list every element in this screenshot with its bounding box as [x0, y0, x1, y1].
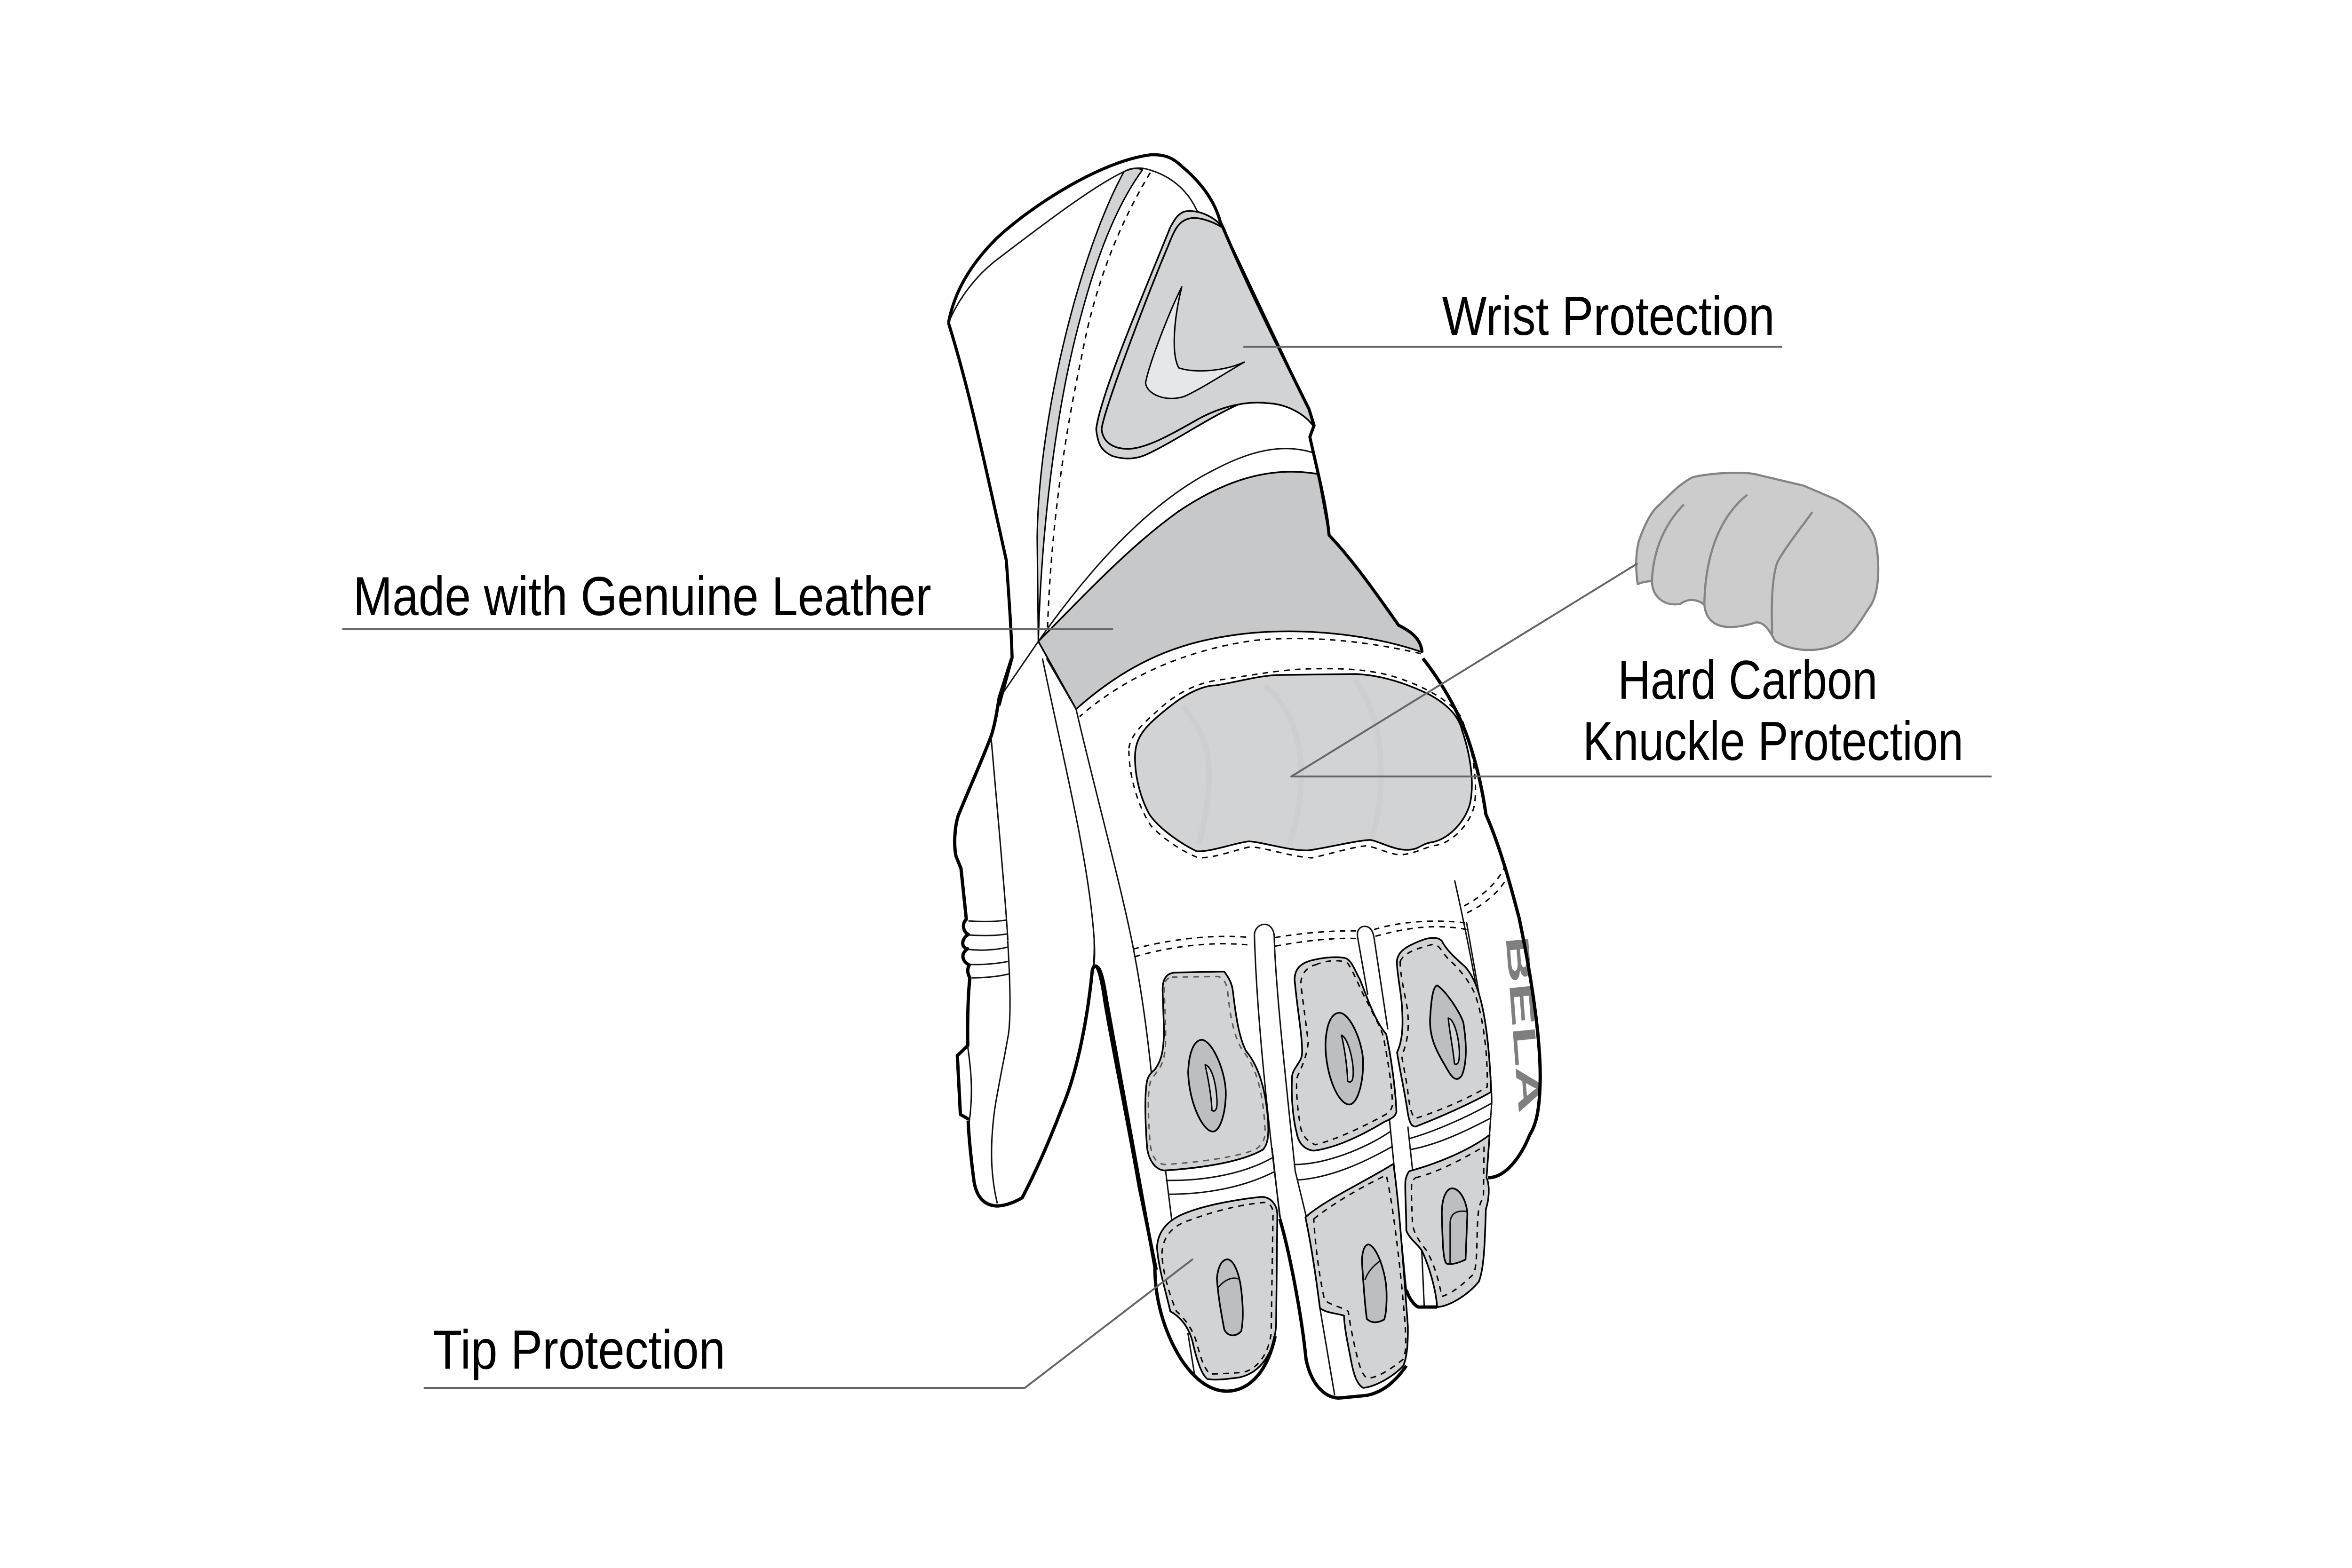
- index finger upper guard: [1145, 972, 1268, 1171]
- ring finger tip outline: [1406, 1290, 1437, 1307]
- label line two: Knuckle Protection: [1583, 711, 1963, 772]
- hand outer right edge: [1423, 658, 1519, 917]
- thumb tip join: [1092, 941, 1094, 972]
- leader lines: [1291, 563, 1992, 776]
- cuff stitching: [1048, 173, 1150, 627]
- hand and thumb section: [955, 658, 1519, 1078]
- thumb ribs: [969, 920, 1009, 978]
- fingers section: [1096, 917, 1540, 1398]
- fist silhouette: [1636, 473, 1878, 650]
- patch inner contour: [1102, 218, 1313, 449]
- thumb lower section: [957, 941, 1094, 1206]
- hand right edge: [1224, 229, 1422, 652]
- panel lower seam: [1047, 658, 1076, 709]
- knuckle stitching: [1129, 669, 1476, 858]
- finger seams: [1166, 922, 1492, 1395]
- wrist band curve: [1038, 449, 1312, 641]
- cuff inner line: [948, 168, 1197, 323]
- thumb crotch outline: [1092, 966, 1156, 1270]
- thumb inner curve: [992, 941, 1010, 1204]
- gray side strip: [1037, 168, 1143, 641]
- knuckle protection patch: [1135, 674, 1472, 851]
- leader line: [1243, 346, 1782, 348]
- finger base stitching: [1133, 921, 1467, 957]
- fist icon: hard carbon knuckle: [1636, 473, 1878, 650]
- little finger outline: [1488, 917, 1540, 1178]
- thumb bottom outline: [968, 970, 1092, 1206]
- leader line: [424, 1259, 1193, 1388]
- genuine leather panel: [1038, 472, 1422, 709]
- callout: tip protection: [424, 1259, 1193, 1388]
- label: Tip Protection: [433, 1319, 725, 1381]
- thumb seam: [1001, 641, 1038, 696]
- outer dashed seams: [1464, 868, 1507, 913]
- callout: hard carbon knuckle protection: [1291, 563, 1992, 776]
- fist finger lines: [1652, 495, 1812, 634]
- label: Made with Genuine Leather: [353, 566, 931, 627]
- label: Wrist Protection: [1442, 285, 1775, 347]
- thumb inner seam: [991, 736, 1008, 941]
- cuff and wrist section: [948, 155, 1422, 717]
- leader line: [342, 628, 1113, 630]
- swoosh logo: [1145, 287, 1244, 398]
- middle finger upper guard: [1292, 957, 1397, 1151]
- middle finger outline: [1280, 1219, 1406, 1398]
- index finger seam: [1076, 709, 1152, 1074]
- glove illustration: [948, 155, 1548, 1398]
- index fingertip protection: [1157, 1197, 1277, 1380]
- thumb inner seam two: [1042, 658, 1095, 967]
- index finger outline: [1096, 966, 1275, 1391]
- upper side seam: [1454, 880, 1491, 1078]
- knuckle grooves: [1182, 680, 1381, 844]
- panel stitching: [1080, 639, 1421, 717]
- ring fingertip protection: [1405, 1135, 1490, 1307]
- wrist protection patch: [1096, 211, 1309, 459]
- cuff outer outline: [948, 155, 1224, 323]
- thumb outer edge: [955, 658, 1011, 978]
- middle fingertip protection: [1305, 1164, 1408, 1388]
- thumb tab seam: [968, 1045, 971, 1123]
- ring finger upper guard: [1397, 938, 1491, 1126]
- thumb back edge: [957, 977, 970, 1119]
- label line one: Hard Carbon: [1618, 649, 1877, 711]
- cuff back edge: [948, 323, 1012, 705]
- BELA logo: BELA: [1499, 934, 1548, 1115]
- crotch and index edge: [1092, 966, 1156, 1270]
